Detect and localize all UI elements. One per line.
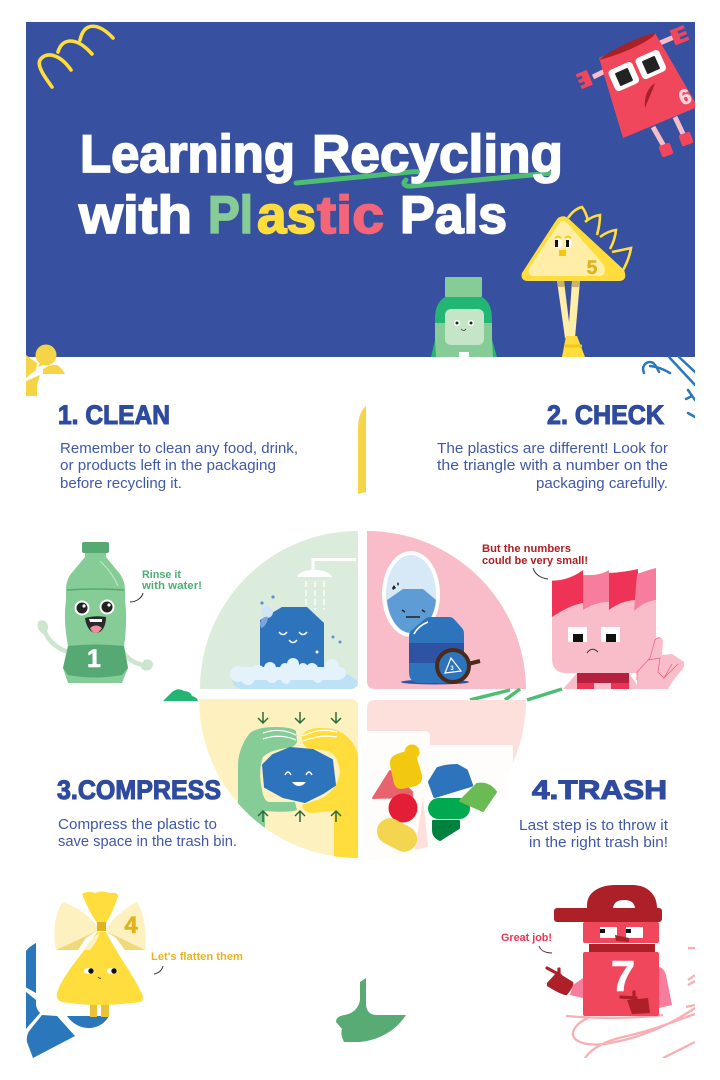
title: Recycling bbox=[312, 125, 563, 184]
text: step 1 description: Remember to clean any food, drink, bbox=[60, 440, 298, 457]
character: yellow triangle number 5: 5 bbox=[587, 258, 598, 279]
decorative pink scribble bbox=[566, 948, 695, 1058]
white trash bin area bbox=[367, 731, 513, 860]
panel: clean quadrant bbox=[200, 531, 358, 689]
text: step 3 description bbox=[58, 816, 237, 850]
icon: pointing hand bbox=[637, 638, 684, 689]
callout: rinse it with water: with water! bbox=[141, 580, 202, 592]
character: red block number 7 bbox=[547, 885, 672, 1016]
text: step 4 description: Last step is to throw it bbox=[519, 817, 669, 834]
callout: flatten them: Let's flatten them bbox=[151, 951, 243, 963]
heading: step 4: 4.TRASH bbox=[532, 775, 667, 805]
character: red cup number 6 bbox=[576, 25, 695, 158]
icon: squeezed blue face bbox=[263, 748, 335, 802]
decorative blue shapes bbox=[25, 943, 109, 1058]
decorative blue scribble bbox=[643, 357, 695, 417]
panel: step 2 check bbox=[437, 400, 668, 492]
title bbox=[78, 132, 560, 234]
title: Pl bbox=[208, 186, 253, 245]
icon: yellow hand bbox=[302, 728, 358, 860]
panel: step 4 trash bbox=[519, 775, 669, 851]
icon: plastic waste pile bbox=[372, 744, 496, 856]
heading: step 1: 1. CLEAN bbox=[58, 400, 170, 430]
character: yellow bag number 4 bbox=[54, 892, 146, 1017]
decorative green leaf bbox=[336, 978, 406, 1042]
finger highlights bbox=[263, 730, 337, 741]
character: green bottle number 3 bbox=[431, 277, 497, 357]
icon: green hand bbox=[238, 727, 297, 828]
decorative yellow flower bbox=[26, 344, 65, 396]
heading: step 2: 2. CHECK bbox=[547, 400, 664, 430]
callout: great job bbox=[501, 932, 552, 953]
text: step 2 description: packaging carefully. bbox=[536, 475, 668, 492]
character: green bottle number 1 bbox=[38, 542, 153, 683]
text: step 2 description bbox=[437, 440, 668, 492]
text: step 3 description: save space in the trash bin. bbox=[58, 833, 237, 850]
icon: blue bottle with magnifier bbox=[401, 617, 480, 684]
title: Learning bbox=[80, 125, 295, 184]
icon: blue bottle with magnifier: 3 bbox=[450, 666, 454, 672]
callout: numbers could be very small: But the numbers bbox=[482, 543, 571, 555]
character: pink block number 3 bbox=[552, 568, 684, 689]
icon: shower bbox=[297, 560, 356, 610]
text: step 2 description: the triangle with a number on the bbox=[437, 457, 668, 474]
callout: rinse it with water bbox=[130, 569, 202, 602]
panel: hero header bbox=[26, 22, 695, 357]
text: step 3 description: Compress the plastic to bbox=[58, 816, 217, 833]
panel: compress quadrant bbox=[199, 699, 358, 860]
title: with bbox=[78, 186, 192, 245]
decorative green stripes bbox=[470, 689, 562, 700]
text: step 1 description bbox=[60, 440, 298, 492]
character: red cup number 6: 6 bbox=[675, 85, 695, 110]
icon: press arrows bbox=[258, 712, 341, 822]
character: yellow bag number 4: 4 bbox=[124, 912, 138, 939]
heading: step 3: 3.COMPRESS bbox=[57, 775, 221, 805]
icon: soap foam bbox=[230, 658, 358, 689]
panel: step 1 clean bbox=[58, 400, 298, 492]
callout: rinse it with water: Rinse it bbox=[142, 569, 181, 581]
panel: check quadrant bbox=[367, 531, 526, 689]
decorative yellow sliver bbox=[358, 406, 366, 494]
callout: great job: Great job! bbox=[501, 932, 552, 944]
panel: step 3 compress bbox=[57, 775, 237, 850]
callout: flatten them bbox=[151, 951, 243, 974]
text: step 4 description: in the right trash bin! bbox=[529, 834, 668, 851]
panel: trash quadrant bbox=[367, 700, 526, 860]
text: step 2 description: The plastics are different! Look for bbox=[437, 440, 668, 457]
decorative green blob bbox=[163, 689, 198, 701]
callout: numbers could be very small: could be very small! bbox=[482, 555, 588, 567]
icon: mirror bbox=[382, 551, 440, 637]
text: step 1 description: before recycling it. bbox=[60, 475, 182, 492]
text: step 4 description bbox=[519, 817, 669, 851]
character: yellow triangle number 5 bbox=[522, 207, 631, 357]
title: Pals bbox=[400, 186, 507, 245]
decorative yellow squiggle bbox=[39, 26, 113, 87]
character: red block number 7: 7 bbox=[611, 952, 635, 1001]
text: step 1 description: or products left in the packaging bbox=[60, 457, 276, 474]
character: green bottle number 1: 1 bbox=[87, 645, 101, 673]
icon: washing blue bottle bbox=[260, 595, 342, 667]
title: tic bbox=[317, 186, 384, 245]
title underline scribble bbox=[296, 172, 553, 186]
title: as bbox=[257, 186, 316, 245]
callout: numbers could be very small bbox=[482, 543, 588, 579]
